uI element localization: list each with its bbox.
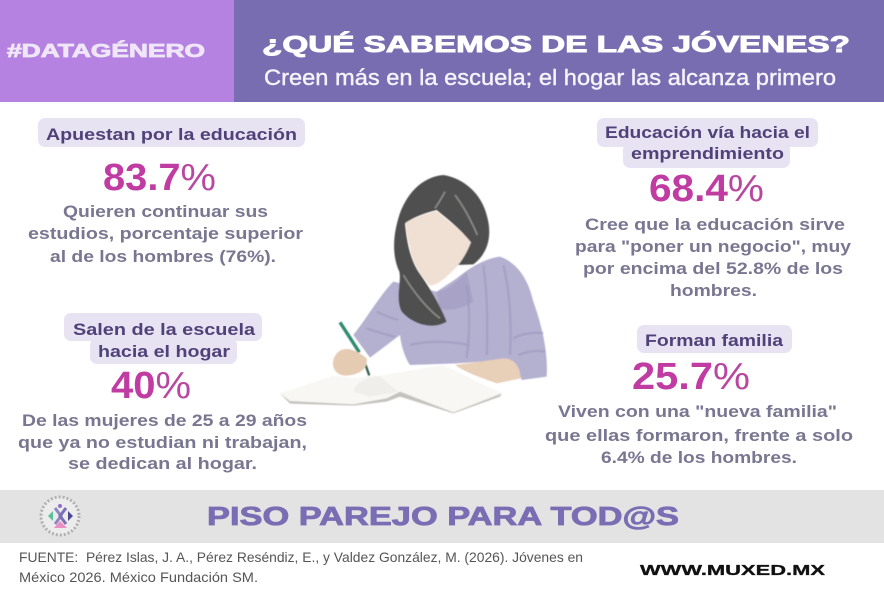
description: que ya no estudian ni trabajan, [18, 433, 307, 452]
website: WWW.MUXED.MX [640, 562, 825, 579]
description: estudios, porcentaje superior [28, 224, 303, 243]
heading pill [597, 118, 818, 168]
description: para "poner un negocio", muy [575, 237, 852, 256]
panel: apuestan por la educación [28, 118, 305, 266]
description: se dedican al hogar. [68, 454, 257, 473]
heading pill: emprendimiento [631, 144, 784, 163]
hashtag label: #DATAGÉNERO [7, 40, 205, 61]
description: al de los hombres (76%). [50, 247, 276, 266]
statistic: 40% [111, 365, 191, 407]
source citation: México 2026. México Fundación SM. [19, 569, 258, 585]
description: Quieren continuar sus [63, 202, 268, 221]
description [28, 202, 303, 266]
statistic: 68.4% [649, 168, 764, 210]
subtitle: Creen más en la escuela; el hogar las alcanza primero [264, 65, 836, 90]
description [575, 215, 852, 300]
description: por encima del 52.8% de los [583, 259, 843, 278]
heading pill [637, 325, 792, 353]
heading pill: Apuestan por la educación [46, 125, 297, 144]
description [18, 411, 307, 473]
icon: muxed logo [41, 497, 79, 535]
heading pill [64, 313, 262, 364]
heading pill: Salen de la escuela [73, 320, 256, 339]
slogan: PISO PAREJO PARA TOD@S [207, 501, 679, 531]
description: De las mujeres de 25 a 29 años [22, 411, 307, 430]
header banner [0, 0, 884, 102]
panel: educación vía hacia el emprendimiento [575, 118, 852, 300]
illustration: young woman writing in a notebook [280, 175, 547, 413]
heading pill [38, 118, 305, 147]
panel: salen de la escuela [18, 313, 307, 473]
description: 6.4% de los hombres. [601, 448, 797, 467]
heading pill: hacia el hogar [98, 342, 230, 361]
footer band [0, 490, 884, 543]
source citation: FUENTE: Pérez Islas, J. A., Pérez Reséndiz, E., y Valdez González, M. (2026). Jóvenes en [19, 549, 583, 565]
heading pill: Educación vía hacia el [605, 123, 810, 142]
title: ¿QUÉ SABEMOS DE LAS JÓVENES? [262, 30, 850, 57]
heading pill: Forman familia [645, 331, 784, 350]
description: hombres. [670, 281, 757, 300]
source citation [19, 549, 583, 585]
statistic: 25.7% [632, 356, 750, 398]
panel: forman familia [545, 325, 853, 467]
description [545, 402, 853, 467]
description: Viven con una "nueva familia" [558, 402, 837, 421]
description: Cree que la educación sirve [585, 215, 845, 234]
description: que ellas formaron, frente a solo [545, 426, 853, 445]
statistic: 83.7% [103, 157, 216, 199]
